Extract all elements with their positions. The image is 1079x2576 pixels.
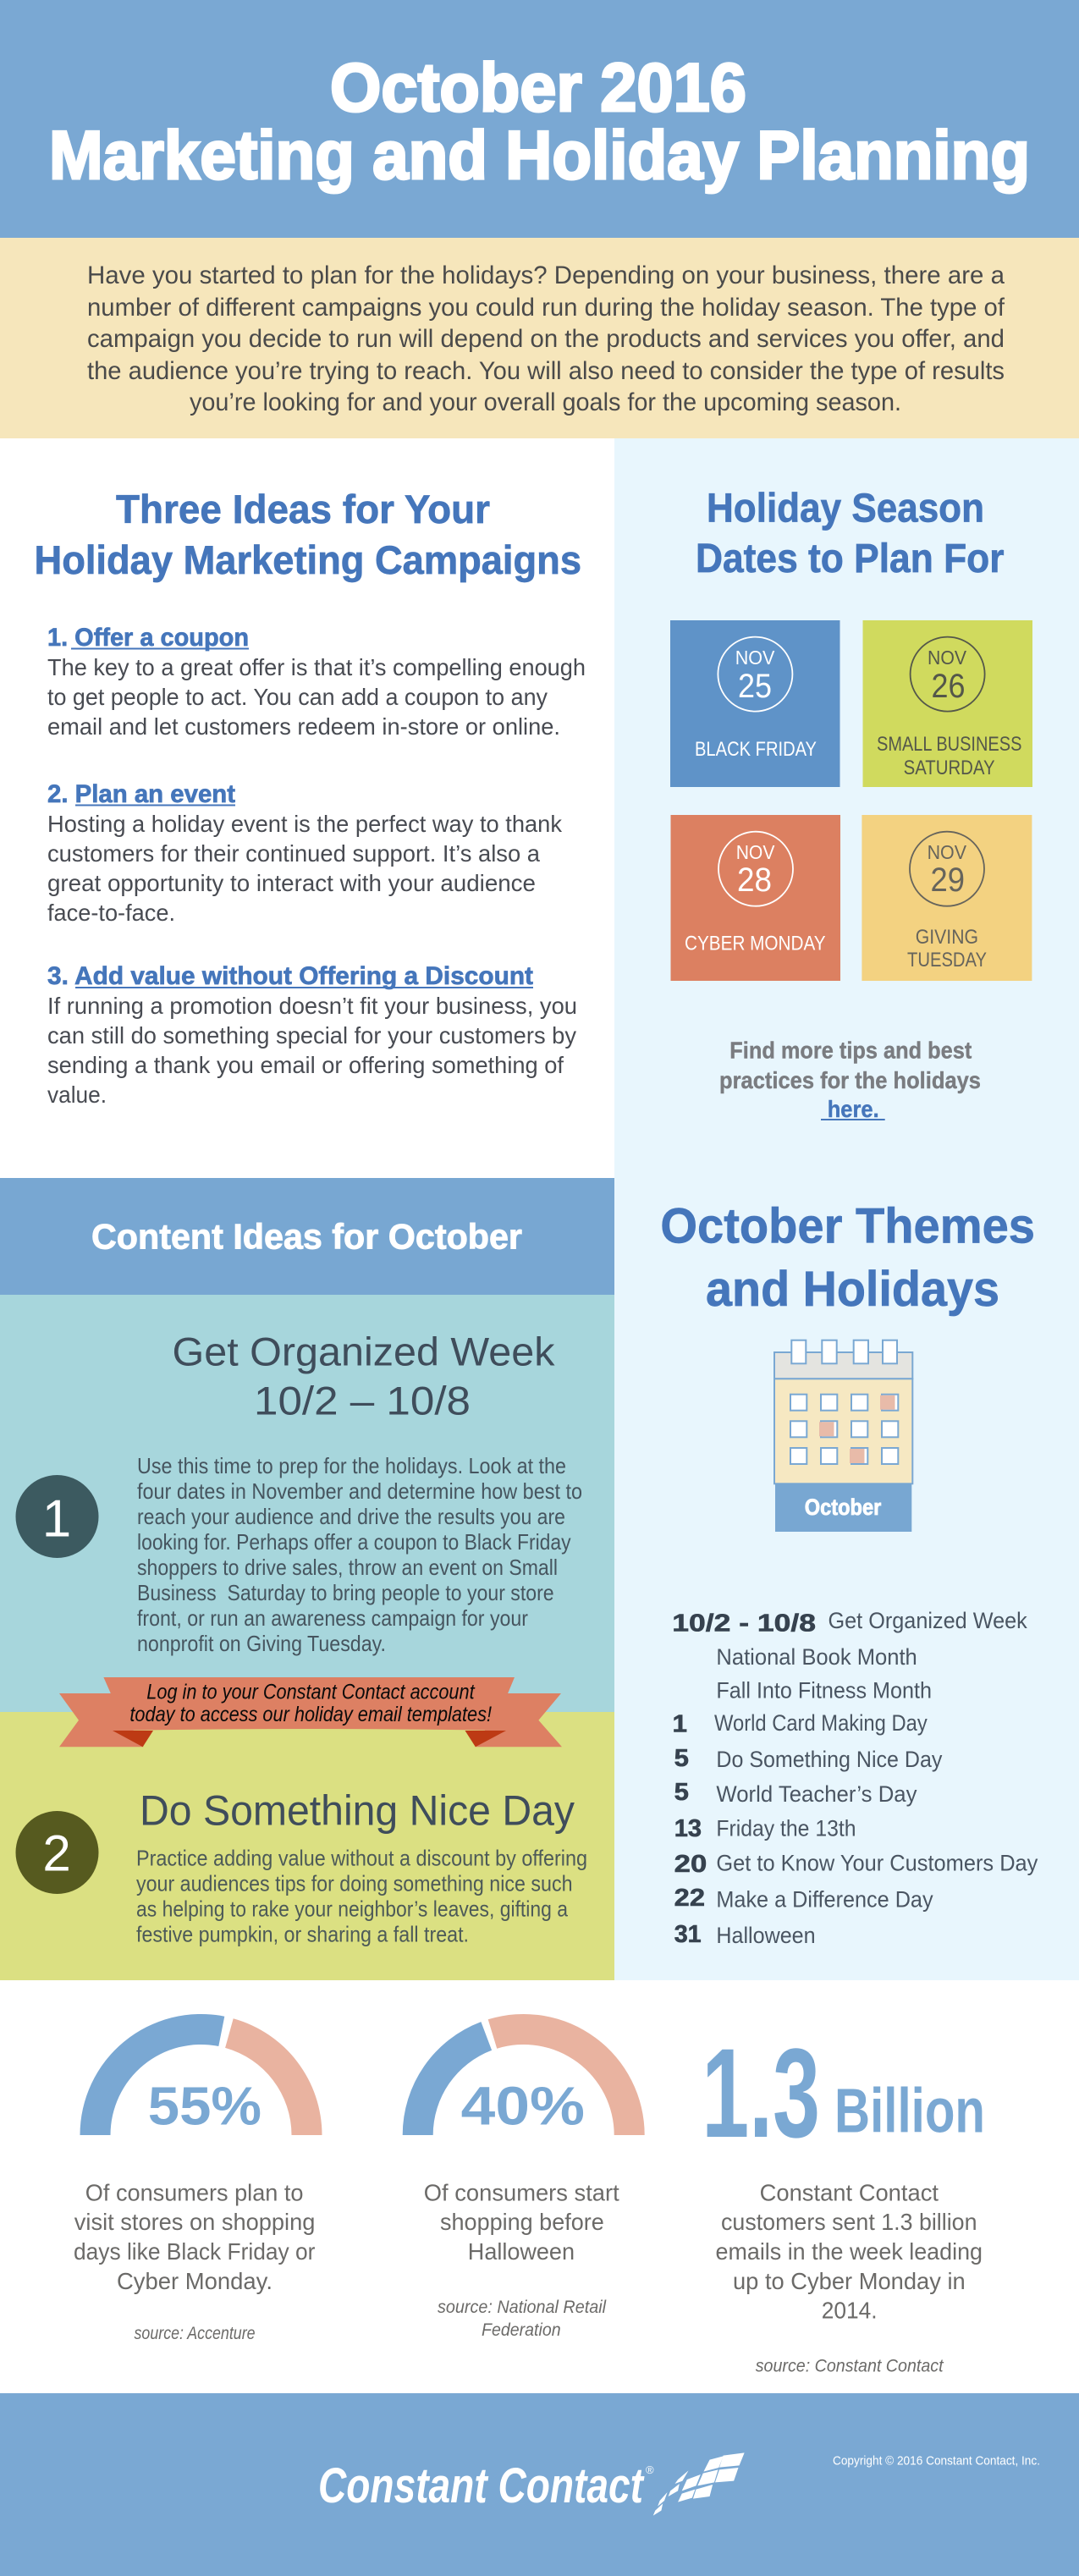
- list: themes and holidays: World Card Making Day: [714, 1710, 928, 1736]
- list: themes and holidays: Halloween: [716, 1923, 816, 1948]
- heading: get organized week: Get Organized Week: [173, 1329, 555, 1374]
- panel: introduction: you’re looking for and your overall goals for the upcoming season.: [190, 388, 901, 416]
- heading: holiday season dates: Holiday Season: [707, 486, 984, 531]
- stat: 55 percent: Of consumers plan to: [85, 2179, 304, 2205]
- panel: content ideas header: [0, 1178, 614, 1295]
- date card: giving tuesday: 29: [931, 861, 965, 899]
- find more tips link: Find more tips and best: [729, 1038, 972, 1064]
- callout ribbon: Log in to your Constant Contact account: [146, 1681, 476, 1704]
- stat: 40 percent: Of consumers start: [424, 2179, 619, 2205]
- idea 2: plan an event: [47, 780, 563, 926]
- stat: 40 percent: source: National Retail: [438, 2298, 607, 2317]
- stat: 55 percent: 55%: [148, 2076, 261, 2137]
- heading: do something nice day: Do Something Nice Day: [140, 1787, 575, 1835]
- date card: small business saturday: NOV: [928, 647, 967, 669]
- date card: small business saturday: [863, 620, 1032, 787]
- panel: introduction: [0, 238, 1079, 438]
- find more tips link: [719, 1038, 981, 1122]
- stat: 55 percent: Cyber Monday.: [117, 2268, 273, 2294]
- list: themes and holidays: 5: [674, 1745, 689, 1772]
- list: themes and holidays: Get Organized Week: [828, 1608, 1027, 1633]
- copyright: Copyright © 2016 Constant Contact, Inc.: [833, 2454, 1040, 2468]
- stat: 40 percent: 40%: [461, 2076, 585, 2137]
- panel: introduction: Have you started to plan for the holidays? Depending on your business, there are a: [87, 261, 1005, 289]
- panel: three ideas: [0, 438, 614, 1179]
- list: themes and holidays: Friday the 13th: [716, 1816, 856, 1841]
- panel: footer: [0, 2393, 1079, 2576]
- text: get organized week description: nonprofit on Giving Tuesday.: [137, 1631, 386, 1656]
- heading: three ideas: Holiday Marketing Campaigns: [34, 537, 581, 582]
- idea 1: offer a coupon: [47, 624, 586, 740]
- list: themes and holidays: Fall Into Fitness Month: [716, 1678, 932, 1704]
- date card: cyber monday: [670, 815, 840, 981]
- list: themes and holidays: 22: [674, 1885, 705, 1912]
- panel: october themes and holidays: [614, 1179, 1079, 1980]
- stat: 1.3 billion: [702, 2022, 985, 2376]
- panel: introduction: campaign you decide to run will depend on the products and services you offer, and: [87, 325, 1005, 353]
- number badge 1: [15, 1475, 98, 1558]
- panel: holiday season dates: [614, 438, 1079, 1179]
- text: get organized week description: looking for. Perhaps offer a coupon to Black Friday: [137, 1529, 571, 1555]
- stat: 1.3 billion: emails in the week leading: [716, 2238, 983, 2265]
- text: do something nice day description: your audiences tips for doing something nice such: [136, 1870, 572, 1896]
- list: themes and holidays: National Book Month: [716, 1644, 917, 1670]
- list: themes and holidays: World Teacher’s Day: [716, 1781, 917, 1807]
- idea 3: add value: 3. Add value without Offering a Discount: [47, 962, 533, 990]
- date card: black friday: 25: [738, 668, 772, 705]
- title: October 2016: [330, 50, 746, 126]
- text: do something nice day description: Practice adding value without a discount by offering: [136, 1845, 587, 1870]
- date card: giving tuesday: GIVING: [916, 926, 978, 949]
- stat: 1.3 billion: 1.3: [702, 2022, 820, 2164]
- idea 3: add value: [47, 962, 577, 1108]
- idea 2: plan an event: 2. Plan an event: [47, 780, 235, 808]
- stat: 40 percent: Halloween: [468, 2238, 575, 2265]
- date card: cyber monday: 28: [737, 861, 772, 899]
- stat: 40 percent: [403, 2014, 645, 2340]
- date card: giving tuesday: TUESDAY: [907, 949, 987, 972]
- panel: get organized week: [0, 1295, 614, 1712]
- number badge 2: [15, 1811, 98, 1894]
- idea 1: offer a coupon: to get people to act. You can add a coupon to any: [47, 684, 548, 710]
- list: themes and holidays: 1: [672, 1711, 687, 1738]
- text: get organized week description: [137, 1453, 582, 1656]
- heading: october themes: and Holidays: [706, 1262, 999, 1317]
- stat: 1.3 billion: customers sent 1.3 billion: [721, 2209, 977, 2235]
- find more tips link: practices for the holidays: [719, 1067, 981, 1093]
- heading: three ideas: Three Ideas for Your: [116, 487, 490, 531]
- idea 1: offer a coupon: email and let customers redeem in-store or online.: [47, 713, 560, 740]
- date card: black friday: BLACK FRIDAY: [695, 738, 817, 761]
- date card: black friday: NOV: [735, 647, 775, 669]
- idea 2: plan an event: face-to-face.: [47, 900, 175, 926]
- callout ribbon: [59, 1677, 562, 1747]
- icon: constant contact flag: [653, 2452, 745, 2516]
- idea 1: offer a coupon: The key to a great offer is that it’s compelling enough: [47, 654, 586, 680]
- text: do something nice day description: festive pumpkin, or sharing a fall treat.: [136, 1921, 469, 1946]
- callout ribbon: today to access our holiday email templates!: [129, 1703, 492, 1726]
- date card: black friday: [670, 620, 840, 787]
- stat: 1.3 billion: 2014.: [822, 2298, 878, 2324]
- number badge 1: 1: [42, 1490, 71, 1549]
- heading: holiday season dates: [696, 486, 1004, 581]
- title: Marketing and Holiday Planning: [49, 118, 1030, 194]
- date card: giving tuesday: [862, 815, 1032, 981]
- idea 2: plan an event: customers for their continued support. It’s also a: [47, 840, 540, 867]
- stat: 40 percent: Federation: [482, 2320, 561, 2340]
- idea 3: add value: value.: [47, 1082, 107, 1108]
- stat: 55 percent: days like Black Friday or: [74, 2238, 315, 2265]
- panel: do something nice day: [0, 1712, 614, 1980]
- text: get organized week description: four dates in November and determine how best to: [137, 1478, 582, 1504]
- list: themes and holidays: Do Something Nice Day: [716, 1747, 943, 1772]
- stat: 55 percent: [74, 2014, 322, 2343]
- text: do something nice day description: as helping to rake your neighbor’s leaves, gifting a: [136, 1896, 568, 1921]
- stat: 55 percent: source: Accenture: [134, 2324, 256, 2343]
- list: themes and holidays: Get to Know Your Customers Day: [716, 1851, 1038, 1876]
- idea 3: add value: sending a thank you email or offering something of: [47, 1052, 564, 1078]
- date card: small business saturday: 26: [931, 668, 965, 705]
- stat: 1.3 billion: source: Constant Contact: [756, 2356, 944, 2376]
- icon: calendar: October: [805, 1494, 882, 1520]
- stat: 1.3 billion: Billion: [834, 2076, 985, 2146]
- list: themes and holidays: [672, 1608, 1038, 1948]
- heading: get organized week: [173, 1329, 555, 1423]
- idea 3: add value: If running a promotion doesn’t fit your business, you: [47, 993, 577, 1019]
- date card: small business saturday: SATURDAY: [904, 757, 995, 779]
- logo: constant contact wordmark: Constant Contact: [318, 2458, 645, 2513]
- list: themes and holidays: 5: [674, 1779, 689, 1806]
- heading: get organized week: 10/2 – 10/8: [254, 1379, 471, 1423]
- stat: 55 percent: visit stores on shopping: [74, 2209, 315, 2235]
- heading: october themes: [660, 1198, 1035, 1317]
- panel: page header: [0, 0, 1079, 238]
- text: get organized week description: front, or run an awareness campaign for your: [137, 1605, 528, 1631]
- date card: giving tuesday: NOV: [928, 841, 967, 863]
- logo: constant contact wordmark: ®: [646, 2463, 654, 2476]
- number badge 2: 2: [42, 1825, 71, 1882]
- stat: 40 percent: shopping before: [440, 2209, 604, 2235]
- stat: 1.3 billion: up to Cyber Monday in: [733, 2268, 966, 2294]
- idea 2: plan an event: great opportunity to interact with your audience: [47, 870, 536, 896]
- panel: introduction: number of different campaigns you could run during the holiday season. The type of: [87, 294, 1005, 322]
- heading: holiday season dates: Dates to Plan For: [696, 537, 1004, 581]
- text: do something nice day description: [136, 1845, 587, 1946]
- find more tips link: here.: [828, 1096, 879, 1122]
- text: get organized week description: Use this time to prep for the holidays. Look at the: [137, 1453, 566, 1478]
- heading: three ideas: [34, 487, 581, 582]
- date card: small business saturday: SMALL BUSINESS: [877, 733, 1021, 756]
- heading: october themes: October Themes: [660, 1198, 1035, 1253]
- list: themes and holidays: Make a Difference Day: [716, 1886, 933, 1912]
- text: get organized week description: reach your audience and drive the results you are: [137, 1504, 565, 1529]
- list: themes and holidays: 13: [674, 1815, 702, 1842]
- date card: cyber monday: NOV: [736, 841, 775, 863]
- idea 2: plan an event: Hosting a holiday event is the perfect way to thank: [47, 811, 563, 837]
- idea 1: offer a coupon: 1. Offer a coupon: [47, 624, 249, 652]
- icon: calendar: [774, 1340, 912, 1532]
- title: [49, 50, 1030, 194]
- idea 3: add value: can still do something special for your customers by: [47, 1022, 576, 1049]
- date card: cyber monday: CYBER MONDAY: [685, 933, 826, 955]
- list: themes and holidays: 31: [674, 1921, 702, 1948]
- text: get organized week description: Business Saturday to bring people to your store: [137, 1580, 554, 1605]
- list: themes and holidays: 20: [674, 1851, 707, 1878]
- panel: introduction: the audience you’re trying to reach. You will also need to consider the type of results: [87, 357, 1005, 385]
- panel: content ideas header: Content Ideas for October: [91, 1217, 522, 1257]
- list: themes and holidays: 10/2 - 10/8: [672, 1610, 816, 1638]
- text: get organized week description: shoppers to drive sales, throw an event on Small: [137, 1555, 558, 1580]
- stat: 1.3 billion: Constant Contact: [760, 2179, 939, 2205]
